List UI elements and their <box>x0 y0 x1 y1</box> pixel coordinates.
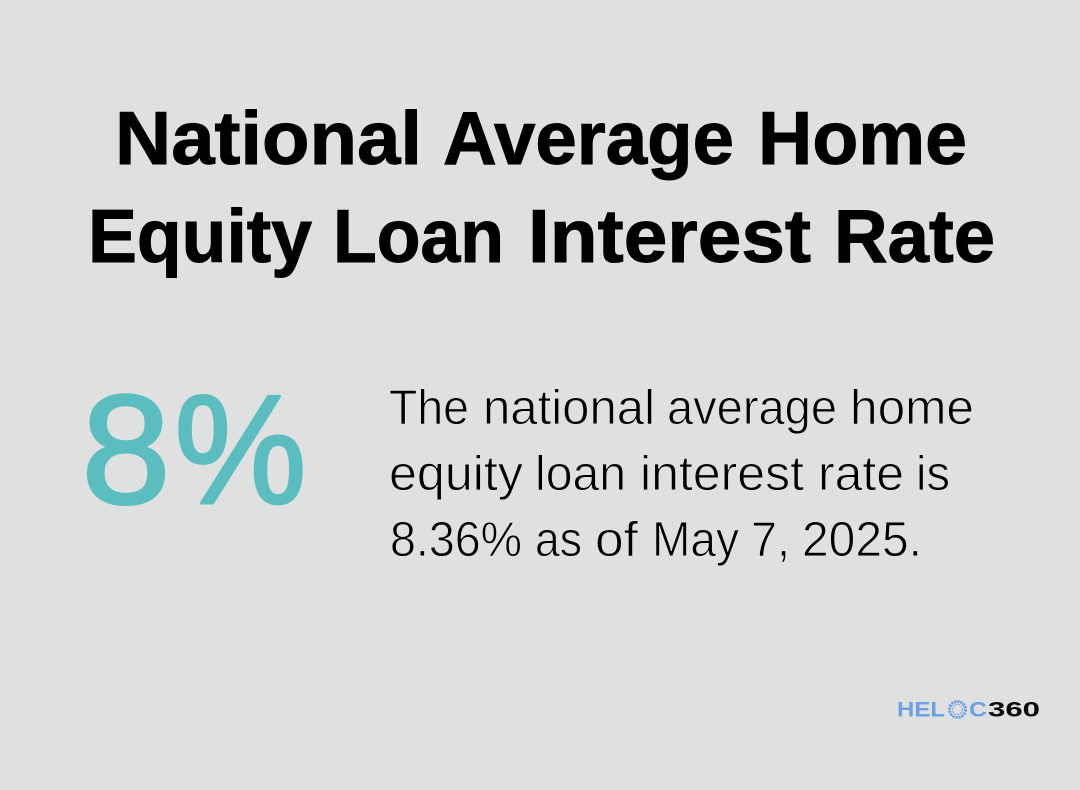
description text <box>389 381 974 567</box>
description text: average <box>667 381 837 435</box>
title: Equity <box>88 194 312 278</box>
description text: rate <box>818 447 904 501</box>
big statistic: 8%: 8 <box>82 363 170 536</box>
description text: as <box>535 513 582 567</box>
logo: HELOC360: HEL <box>897 698 945 722</box>
description text: The <box>389 381 469 435</box>
description text: loan <box>535 447 626 501</box>
title: Interest <box>528 194 811 278</box>
big statistic: 8%: % <box>174 363 306 536</box>
description text: 7, <box>751 513 790 567</box>
description text: of <box>595 513 638 567</box>
title: Rate <box>834 194 995 278</box>
logo: HELOC360: C <box>969 698 987 722</box>
description text: 2025. <box>802 513 922 567</box>
description text: is <box>916 447 950 501</box>
description text: interest <box>640 447 804 501</box>
description text: 8.36% <box>390 513 522 567</box>
title <box>88 96 995 278</box>
description text: May <box>652 513 739 567</box>
title: Loan <box>333 194 504 278</box>
big statistic: 8% <box>82 363 306 536</box>
description text: equity <box>389 447 524 501</box>
title: National <box>115 96 422 180</box>
description text: home <box>850 381 974 435</box>
icon: logo spiral O <box>950 702 966 718</box>
title: Home <box>758 96 967 180</box>
logo: HELOC360: 360 <box>988 698 1040 722</box>
title: Average <box>443 96 734 180</box>
description text: national <box>483 381 655 435</box>
logo: HELOC360 <box>897 698 1040 722</box>
